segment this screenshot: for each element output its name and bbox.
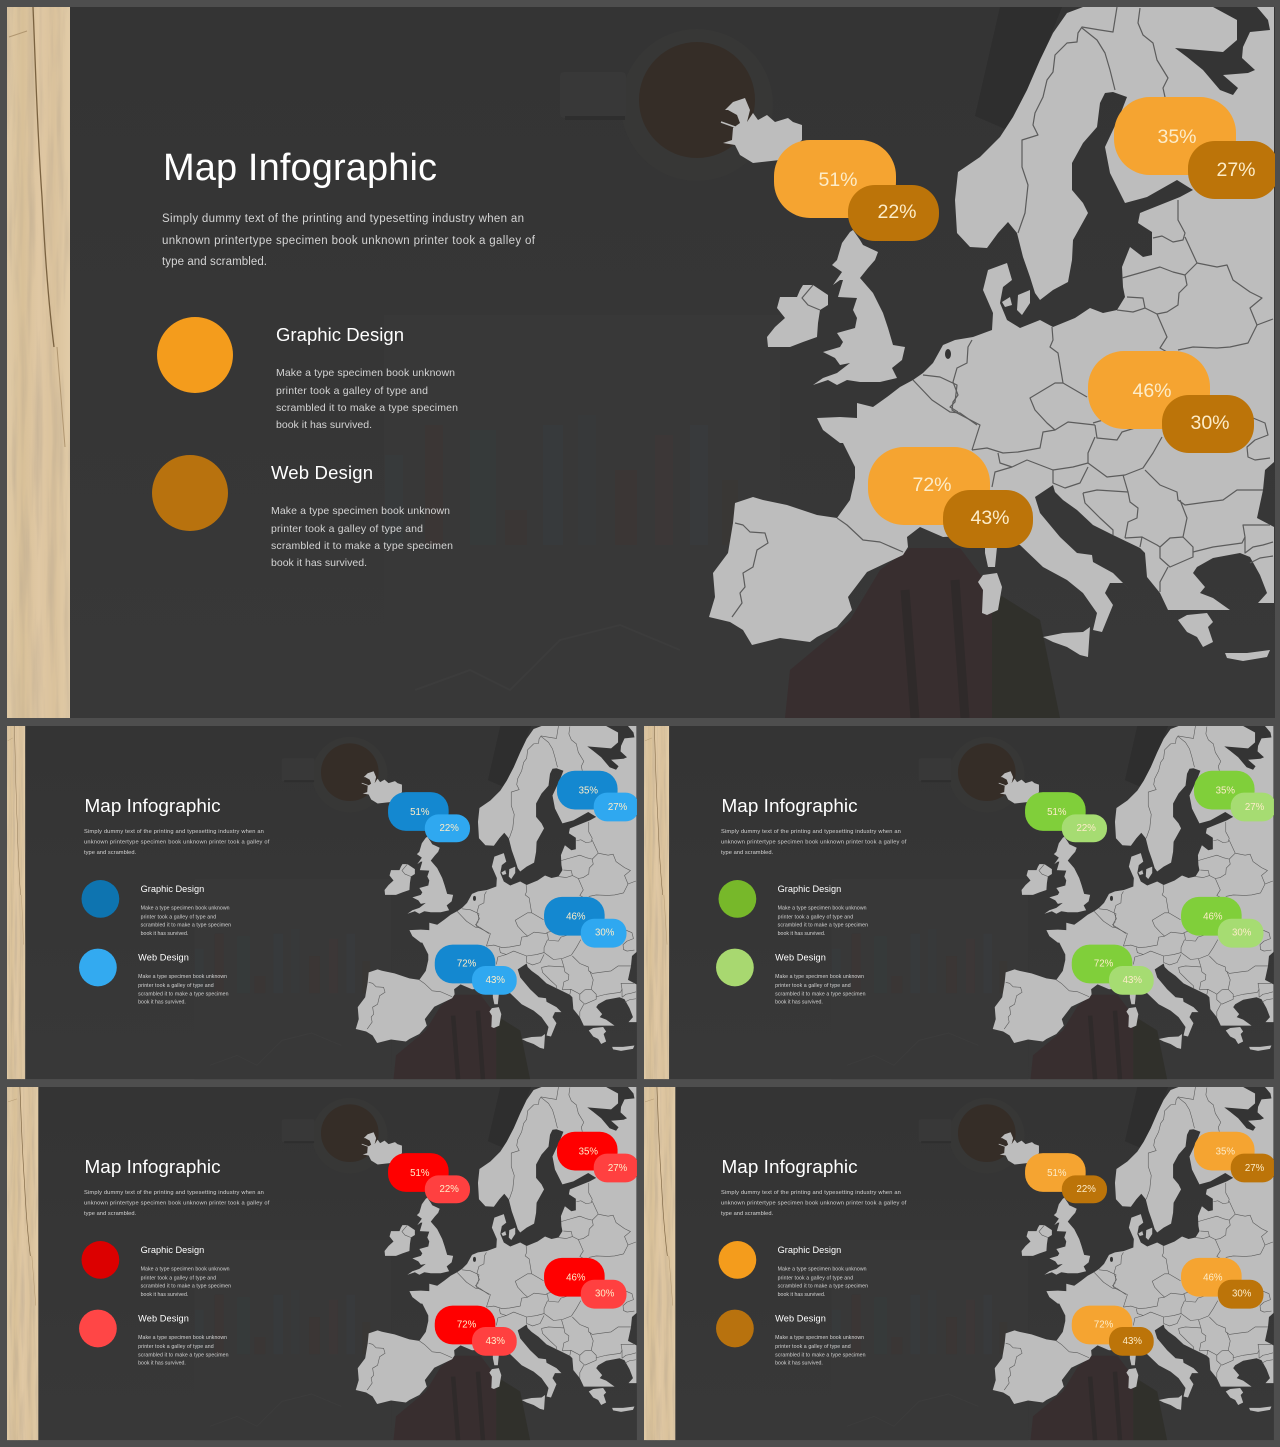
bubble 43%: 43% [970,507,1010,529]
bubble 30%: 30% [595,928,615,939]
bubble 35% [557,771,618,809]
intro text: type and scrambled. [84,1211,137,1217]
background photo [7,7,1275,718]
bubble 46% [1088,351,1210,429]
intro text: Simply dummy text of the printing and typesetting industry when an [84,829,264,835]
bubble 43% [1109,1327,1154,1356]
bubble 72% [1072,1306,1132,1344]
text: graphic design [141,1266,231,1298]
text: web design: book it has survived. [138,1361,186,1367]
bubble 22% [1062,1175,1107,1203]
text: web design [775,974,866,1006]
wood strip [7,7,70,718]
bubble 22%: 22% [439,1184,459,1195]
intro text [84,829,270,856]
bubble 72%: 72% [1094,1319,1114,1330]
heading: graphic design: Graphic Design [276,324,404,345]
intro text: unknown printertype specimen book unknown printer took a galley of [84,1201,270,1207]
legend circle: web design [716,1310,754,1347]
wood strip [644,1087,675,1440]
text: graphic design: Make a type specimen book unknown [141,1266,230,1272]
intro text: unknown printertype specimen book unknown printer took a galley of [721,1201,907,1207]
text: web design [775,1335,866,1367]
heading: graphic design: Graphic Design [778,884,841,894]
bubble 27%: 27% [1216,159,1256,181]
heading: web design: Web Design [775,952,826,962]
bubble 30%: 30% [1190,412,1230,434]
bubble 30% [581,919,627,948]
text: web design: scrambled it to make a type specimen [775,991,866,997]
bubble 51% [388,792,449,831]
bubble 22% [848,185,939,241]
bubble 51%: 51% [410,1168,430,1179]
legend circle: graphic design [719,880,756,918]
bubble 35%: 35% [1157,126,1197,148]
bubble 46% [1181,1258,1242,1297]
intro text [721,829,907,856]
bubble 46%: 46% [1203,912,1223,923]
text: graphic design: scrambled it to make a type specimen [141,1284,231,1290]
bubble 30% [1218,1280,1264,1309]
text: graphic design: Make a type specimen book unknown [141,905,230,911]
text: web design: Make a type specimen book unknown [138,974,227,980]
bubble 72% [435,945,495,983]
bubble 22%: 22% [1076,823,1096,834]
bubble 72%: 72% [457,1319,477,1330]
text: web design: Make a type specimen book unknown [775,974,864,980]
bubble 27%: 27% [608,1163,628,1174]
text: graphic design [141,905,231,937]
bubble 43% [472,1327,517,1356]
intro text: type and scrambled. [721,1211,774,1217]
background photo [7,726,637,1079]
bubble 22%: 22% [1076,1184,1096,1195]
text: web design: scrambled it to make a type specimen [775,1352,866,1358]
europe map [993,726,1273,1051]
bubble 51%: 51% [1047,807,1067,818]
legend circle: web design [79,949,117,986]
bubble 43% [943,490,1033,548]
intro text [162,213,536,268]
text: graphic design [276,367,458,431]
background photo [644,1087,1274,1440]
bubble 22%: 22% [877,201,917,223]
bubble 27% [1188,141,1279,199]
intro text: Simply dummy text of the printing and typesetting industry when an [162,213,524,225]
text: graphic design: printer took a galley of type and [141,914,216,920]
heading: web design: Web Design [775,1313,826,1323]
bubble 22% [425,1175,470,1203]
bubble 35%: 35% [1216,1147,1235,1158]
europe map [709,7,1274,661]
bubble 22% [1062,814,1107,842]
heading: graphic design: Graphic Design [141,1245,204,1255]
text: graphic design: scrambled it to make a type specimen [276,402,458,414]
text: graphic design: printer took a galley of type and [778,1275,853,1281]
bubble 43%: 43% [1123,1336,1142,1347]
europe map [356,726,636,1051]
slide: small green version [644,726,1276,1079]
bubble 27%: 27% [1245,802,1265,813]
bubble 51%: 51% [1047,1168,1067,1179]
bubble 72% [435,1306,495,1344]
slide: small orange version [644,1087,1276,1440]
slide: large orange version [7,7,1279,718]
bubble 46%: 46% [1203,1273,1223,1284]
text: graphic design [778,1266,868,1298]
bubble 43% [1109,966,1154,995]
intro text: type and scrambled. [721,850,774,856]
bubble 30% [581,1280,627,1309]
bubble 30%: 30% [1232,928,1252,939]
text: graphic design: Make a type specimen book unknown [276,367,455,379]
bubble 35%: 35% [579,1147,598,1158]
intro text: type and scrambled. [84,850,137,856]
text: graphic design: scrambled it to make a type specimen [778,923,868,929]
title: Map Infographic [163,147,437,189]
legend circle: web design [152,455,228,531]
bubble 27% [594,1154,639,1182]
text: web design: printer took a galley of type and [775,1344,851,1350]
intro text: Simply dummy text of the printing and typesetting industry when an [84,1190,264,1196]
bubble 51% [1025,1153,1086,1192]
bubble 51%: 51% [818,169,858,191]
legend circle: graphic design [82,1241,119,1279]
text: web design: Make a type specimen book unknown [271,505,450,517]
text: web design: Make a type specimen book unknown [138,1335,227,1341]
bubble 35% [1194,1132,1255,1170]
title: Map Infographic [721,795,858,816]
bubble 46%: 46% [566,912,586,923]
background photo [644,726,1274,1079]
text: web design: printer took a galley of type and [271,523,423,535]
text: web design [271,505,453,569]
text: web design: printer took a galley of type and [138,1344,214,1350]
text: graphic design: printer took a galley of type and [778,914,853,920]
bubble 30%: 30% [1232,1289,1252,1300]
text: web design: scrambled it to make a type specimen [138,991,229,997]
bubble 30%: 30% [595,1289,615,1300]
text: web design: book it has survived. [775,1361,823,1367]
slide: small red version [7,1087,639,1440]
wood strip [644,726,669,1079]
bubble 72% [868,447,990,525]
bubble 27% [1231,793,1276,821]
intro text: unknown printertype specimen book unknown printer took a galley of [84,840,270,846]
legend circle: graphic design [157,317,233,393]
bubble 51%: 51% [410,807,430,818]
intro text: unknown printertype specimen book unknown printer took a galley of [162,235,536,247]
title: Map Infographic [84,795,221,816]
text: web design: book it has survived. [775,1000,823,1006]
text: web design: book it has survived. [271,557,367,569]
heading: graphic design: Graphic Design [141,884,204,894]
bubble 46%: 46% [566,1273,586,1284]
text: web design: scrambled it to make a type specimen [138,1352,229,1358]
bubble 43%: 43% [486,975,505,986]
bubble 72%: 72% [1094,958,1114,969]
text: graphic design: scrambled it to make a type specimen [141,923,231,929]
legend circle: web design [716,949,754,986]
title: Map Infographic [721,1156,858,1177]
bubble 30% [1218,919,1264,948]
heading: web design: Web Design [138,1313,189,1323]
europe map [993,1087,1273,1412]
text: graphic design: Make a type specimen book unknown [778,905,867,911]
europe map [356,1087,636,1412]
text: graphic design: book it has survived. [141,931,188,937]
bubble 35% [1114,97,1236,175]
text: web design: printer took a galley of type and [775,983,851,989]
bubble 46% [544,1258,605,1297]
intro text: Simply dummy text of the printing and typesetting industry when an [721,829,901,835]
text: graphic design: scrambled it to make a type specimen [778,1284,868,1290]
legend circle: graphic design [82,880,119,918]
bubble 51% [388,1153,449,1192]
wood strip [7,726,25,1079]
bubble 27%: 27% [1245,1163,1265,1174]
bubble 72%: 72% [912,474,952,496]
bubble 43%: 43% [1123,975,1142,986]
text: web design: scrambled it to make a type specimen [271,540,453,552]
bubble 72% [1072,945,1132,983]
bubble 43% [472,966,517,995]
bubble 27% [1231,1154,1276,1182]
bubble 30% [1162,395,1254,453]
bubble 51% [774,140,896,218]
intro text [721,1190,907,1217]
text: graphic design: book it has survived. [276,419,372,431]
text: graphic design: book it has survived. [141,1292,188,1298]
bubble 22% [425,814,470,842]
bubble 51% [1025,792,1086,831]
bubble 27% [594,793,639,821]
bubble 46% [544,897,605,936]
bubble 46% [1181,897,1242,936]
intro text: Simply dummy text of the printing and typesetting industry when an [721,1190,901,1196]
text: web design: printer took a galley of type and [138,983,214,989]
wood strip [7,1087,38,1440]
text: graphic design: Make a type specimen book unknown [778,1266,867,1272]
intro text: unknown printertype specimen book unknown printer took a galley of [721,840,907,846]
bubble 35% [1194,771,1255,809]
text: web design [138,974,229,1006]
bubble 35%: 35% [579,786,598,797]
bubble 22%: 22% [439,823,459,834]
text: web design [138,1335,229,1367]
text: graphic design [778,905,868,937]
text: web design: Make a type specimen book unknown [775,1335,864,1341]
background photo [7,1087,637,1440]
text: graphic design: book it has survived. [778,931,825,937]
intro text [84,1190,270,1217]
bubble 35% [557,1132,618,1170]
bubble 43%: 43% [486,1336,505,1347]
heading: web design: Web Design [271,462,373,483]
title: Map Infographic [84,1156,221,1177]
text: graphic design: printer took a galley of type and [141,1275,216,1281]
legend circle: graphic design [719,1241,756,1279]
bubble 35%: 35% [1216,786,1235,797]
slide: small blue version [7,726,639,1079]
bubble 46%: 46% [1132,380,1172,402]
text: graphic design: book it has survived. [778,1292,825,1298]
heading: web design: Web Design [138,952,189,962]
text: graphic design: printer took a galley of type and [276,385,428,397]
bubble 72%: 72% [457,958,477,969]
bubble 27%: 27% [608,802,628,813]
legend circle: web design [79,1310,117,1347]
heading: graphic design: Graphic Design [778,1245,841,1255]
text: web design: book it has survived. [138,1000,186,1006]
intro text: type and scrambled. [162,256,267,268]
